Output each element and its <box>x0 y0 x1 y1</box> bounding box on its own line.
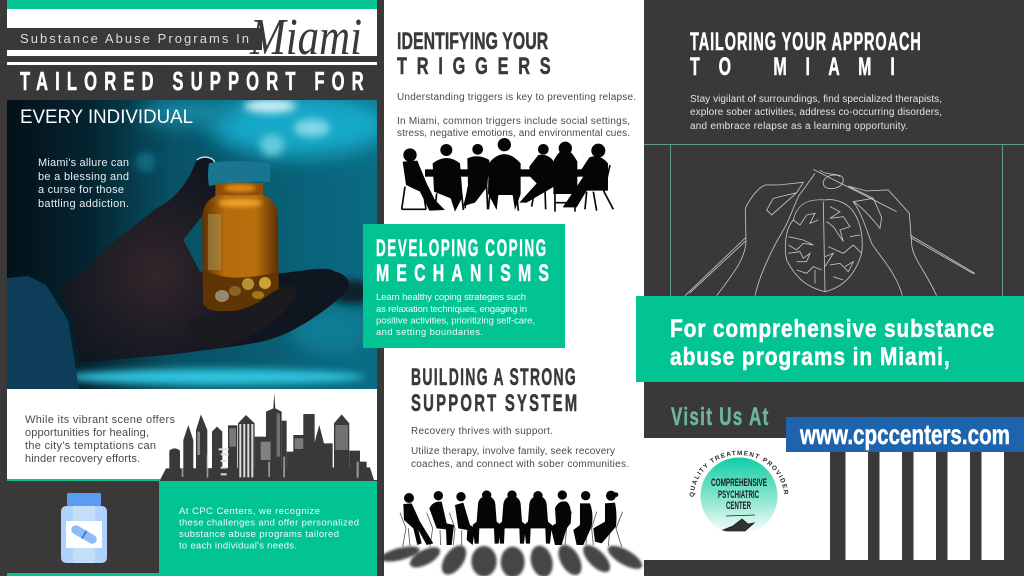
photo caption: be a blessing and <box>38 171 129 183</box>
brain folds <box>788 213 822 283</box>
heading: T O M I A M I <box>690 54 895 81</box>
main heading line: TAILORED SUPPORT FOR <box>20 66 364 96</box>
logo circle <box>700 458 778 534</box>
paragraph: stress, negative emotions, and environmental cues. <box>397 128 630 139</box>
panel: call to action <box>636 296 1024 431</box>
paragraph: coaches, and connect with sober communities. <box>411 459 629 470</box>
paragraph: positive activities, prioritizing self-care, <box>376 316 535 326</box>
paragraph <box>411 426 629 470</box>
paragraph <box>690 94 942 132</box>
white card <box>644 438 830 560</box>
paragraph: as relaxation techniques, engaging in <box>376 304 527 315</box>
brain outline <box>785 200 862 292</box>
paragraph: Learn healthy coping strategies such <box>376 292 526 303</box>
panel: center column <box>379 0 645 576</box>
yarn <box>820 170 843 189</box>
banner text <box>670 314 994 370</box>
paragraph: Stay vigilant of surroundings, find specialized therapists, <box>690 94 942 105</box>
heading: SUPPORT SYSTEM <box>411 391 577 417</box>
paragraph: Utilize therapy, involve family, seek recovery <box>411 446 615 457</box>
paragraph: the city's temptations can <box>25 440 156 452</box>
bottom green strip <box>7 573 377 576</box>
logo name: COMPREHENSIVE <box>711 477 767 489</box>
paragraph <box>376 292 535 338</box>
white column <box>384 0 644 576</box>
panel: Miami skyline <box>7 389 377 481</box>
panel: left column header <box>7 0 377 96</box>
pills in bottle <box>203 268 279 311</box>
logo: Comprehensive Psychiatric Center <box>690 450 788 532</box>
icon: handshake <box>723 515 755 531</box>
logo name <box>711 477 767 512</box>
banner text: abuse programs in Miami, <box>670 342 950 370</box>
white panel <box>7 389 377 480</box>
blue URL banner <box>786 417 1024 452</box>
heading <box>376 235 549 287</box>
capsule <box>70 524 98 545</box>
logo name: PSYCHIATRIC <box>718 489 759 501</box>
bottle body <box>202 195 279 311</box>
panel: photo heading and caption <box>20 107 193 210</box>
photo background <box>7 100 377 389</box>
paragraph: explore sober activities, address co-occurring disorders, <box>690 107 942 118</box>
heading: TAILORING YOUR APPROACH <box>690 29 921 56</box>
paragraph <box>25 414 176 465</box>
top green bar <box>7 0 377 9</box>
bottle label <box>66 521 102 548</box>
paragraph <box>397 92 636 139</box>
panel: pill bottle and CPC statement <box>7 481 377 576</box>
panel: striped website block <box>786 417 1024 560</box>
illustration: group at table silhouettes <box>402 138 613 212</box>
dark subtitle band <box>7 28 262 50</box>
amber bottle <box>202 161 279 311</box>
right hand <box>848 186 937 296</box>
paragraph: opportunities for healing, <box>25 427 149 439</box>
people <box>403 490 618 545</box>
subtitle text: Substance Abuse Programs In <box>20 31 249 46</box>
statement text: these challenges and offer personalized <box>179 518 359 528</box>
heading <box>690 29 921 81</box>
heading: DEVELOPING COPING <box>376 235 546 262</box>
hand <box>58 157 349 363</box>
green statement box <box>159 481 377 573</box>
divider line <box>7 62 377 65</box>
skyline silhouette <box>160 393 374 480</box>
paragraph: In Miami, common triggers include social settings, <box>397 116 630 127</box>
heading: BUILDING A STRONG <box>411 364 576 391</box>
illustration: support circle silhouettes <box>379 490 645 576</box>
illustration: hands knitting a brain <box>685 169 975 296</box>
fingers over bottle <box>210 286 296 350</box>
panel: developing coping mechanisms <box>363 224 565 348</box>
white header band <box>7 9 377 56</box>
panel: photo of hand holding amber pill bottle <box>7 93 390 389</box>
paragraph: While its vibrant scene offers <box>25 414 176 426</box>
script word Miami: Miami <box>249 9 362 66</box>
green rule <box>7 479 160 481</box>
thin frame lines <box>644 144 1024 300</box>
heading <box>397 29 551 80</box>
needles <box>685 169 975 296</box>
statement text <box>179 506 359 552</box>
bottle neck <box>216 183 263 196</box>
green box <box>363 224 565 348</box>
shadows <box>379 541 645 576</box>
chairs <box>400 512 623 547</box>
paragraph: Understanding triggers is key to preventing relapse. <box>397 92 636 103</box>
statement text: substance abuse programs tailored <box>179 529 339 540</box>
photo caption: battling addiction. <box>38 198 129 210</box>
paragraph: and setting boundaries. <box>376 327 483 338</box>
glass highlight <box>208 214 221 270</box>
arc text: QUALITY TREATMENT PROVIDER <box>690 450 788 497</box>
visit us at: Visit Us At <box>671 403 768 431</box>
bottle body <box>61 506 107 563</box>
bottle cap <box>67 493 101 506</box>
photo caption: Miami's allure can <box>38 157 129 169</box>
statement text: At CPC Centers, we recognize <box>179 506 320 517</box>
section: building support system <box>411 364 629 470</box>
paragraph: and embrace relapse as a learning opportunity. <box>690 121 908 132</box>
icon: blue pill bottle <box>61 493 107 563</box>
photo caption <box>38 157 129 210</box>
section: identifying triggers <box>397 29 636 139</box>
sleeve <box>7 276 79 389</box>
panel: tailoring your approach <box>644 29 1024 300</box>
panel: logo card <box>644 438 830 560</box>
photo caption: a curse for those <box>38 184 124 196</box>
heading: TRIGGERS <box>397 53 551 80</box>
heading continuation: EVERY INDIVIDUAL <box>20 107 193 128</box>
heading: IDENTIFYING YOUR <box>397 29 548 55</box>
green banner <box>636 296 1024 382</box>
bottle cap <box>208 161 270 186</box>
paragraph: Recovery thrives with support. <box>411 426 553 437</box>
heading <box>411 364 577 417</box>
bokeh lights <box>65 93 390 385</box>
white stripes <box>846 450 1004 560</box>
paragraph: hinder recovery efforts. <box>25 453 140 465</box>
statement text: to each individual's needs. <box>179 540 297 552</box>
left hand <box>717 182 803 296</box>
banner text: For comprehensive substance <box>670 314 994 342</box>
heading: MECHANISMS <box>376 261 549 287</box>
logo name: CENTER <box>726 500 751 512</box>
